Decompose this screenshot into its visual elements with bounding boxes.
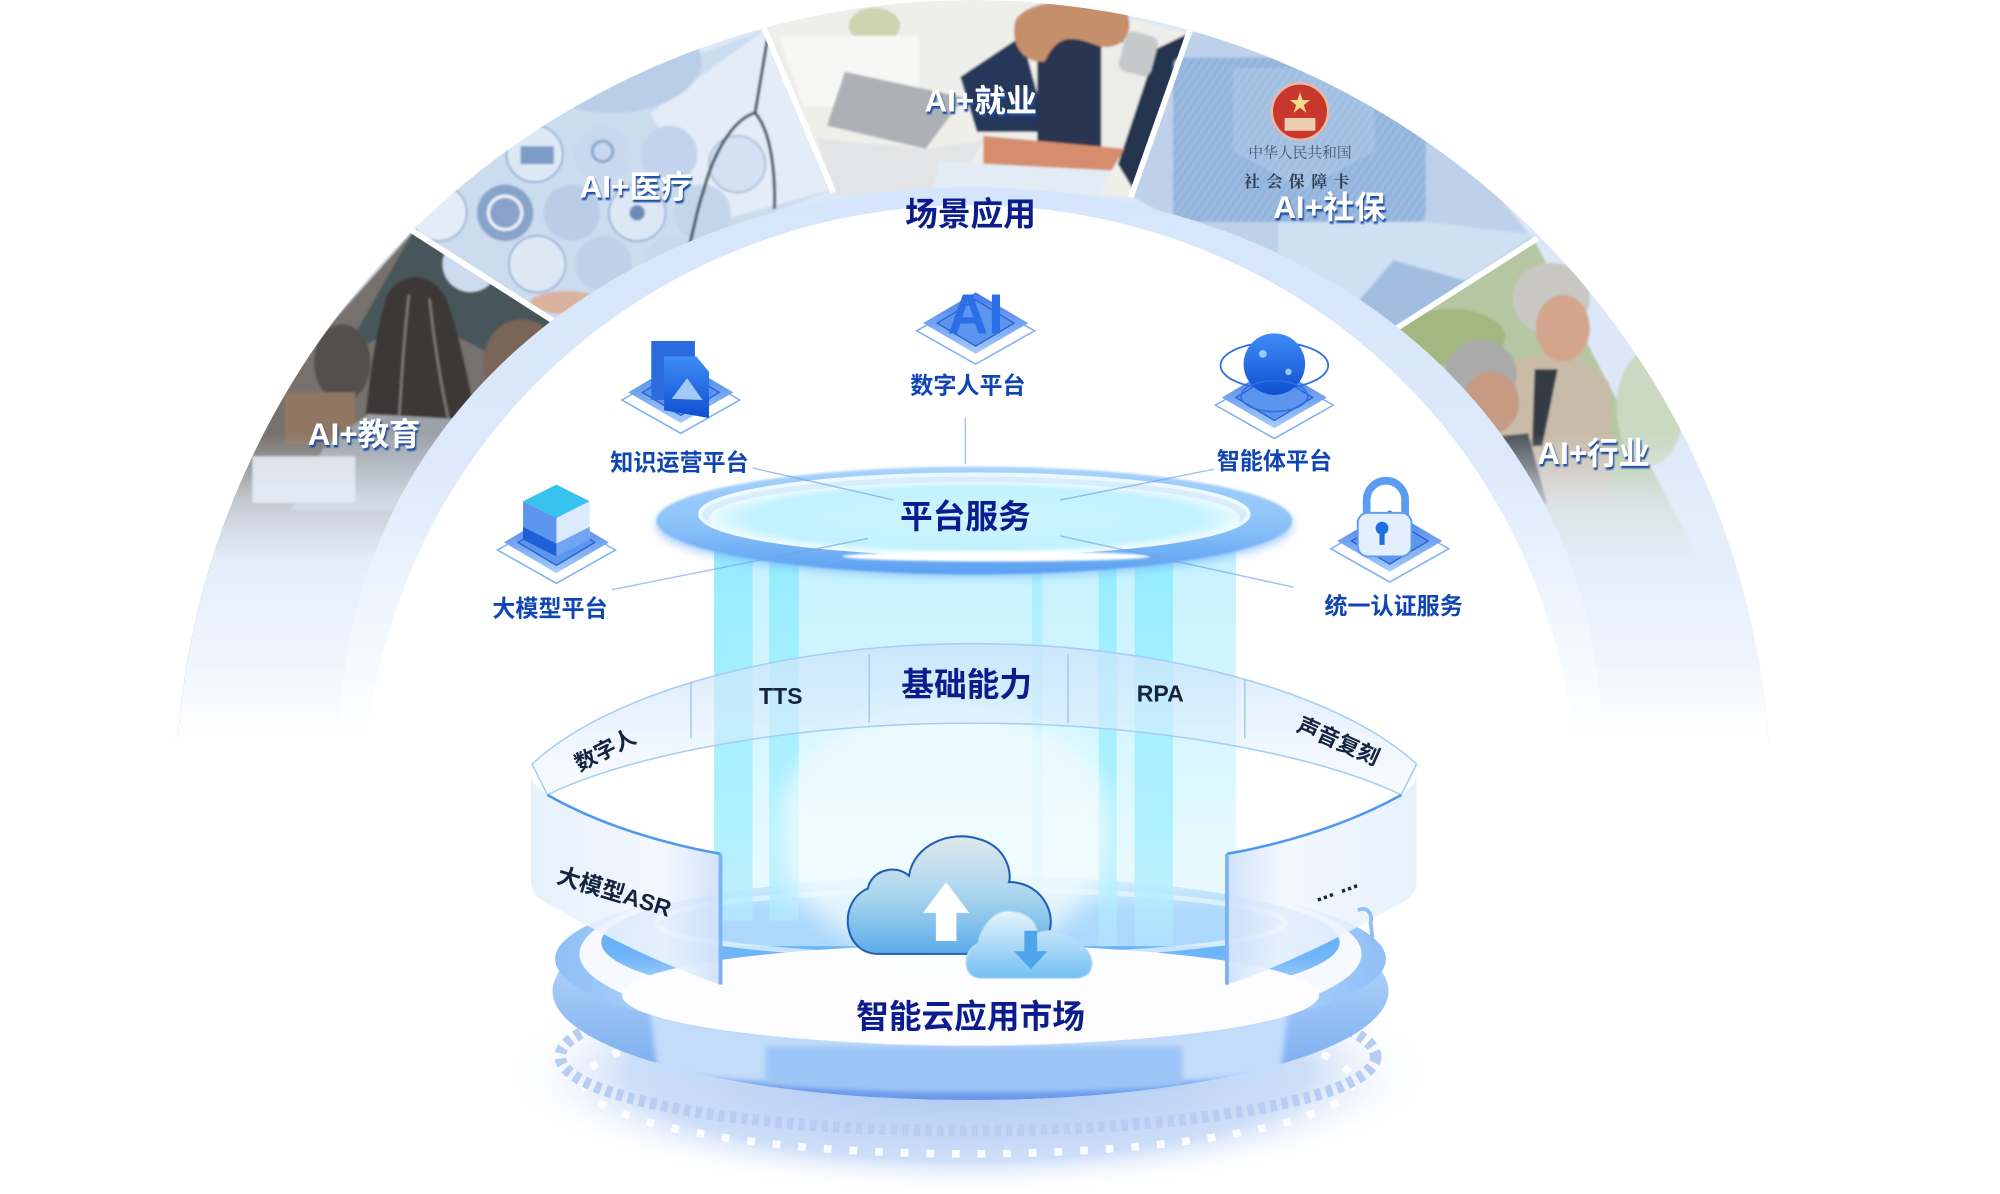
capability labels: 声音复刻 <box>1294 712 1383 770</box>
photo sectors <box>163 0 1791 738</box>
service: unified authentication <box>1324 481 1463 619</box>
sector labels: AI+医疗 <box>580 169 692 204</box>
capability labels: 数字人 <box>570 724 640 776</box>
heading: cloud app market: 智能云应用市场 <box>856 998 1085 1035</box>
heading: platform services: 平台服务 <box>900 498 1031 535</box>
capability labels: TTS <box>759 683 803 709</box>
service: digital human platform: 数字人平台 <box>910 373 1026 399</box>
capability labels: 基础能力 <box>901 666 1032 703</box>
heading: scene applications: 场景应用 <box>905 196 1036 233</box>
platform services disk <box>656 467 1292 577</box>
icon: documents <box>622 341 740 433</box>
social card emblem and text: 社会保障卡 <box>1244 172 1356 191</box>
base fill of outer arc <box>163 0 1791 741</box>
base well <box>601 876 1340 1009</box>
capability labels <box>570 666 1383 776</box>
photo: industry <box>1387 241 1791 738</box>
foundation ring left panel <box>530 764 721 985</box>
service: knowledge platform <box>610 341 749 476</box>
service: agent platform: 智能体平台 <box>1217 448 1332 474</box>
icon: lock <box>1331 481 1449 582</box>
foundation ring right panel: ... ... <box>1310 867 1361 907</box>
connector lines <box>612 418 1294 590</box>
service: large model platform: 大模型平台 <box>492 596 608 622</box>
social card emblem and text: 中华人民共和国 <box>1248 145 1352 162</box>
base body <box>553 882 1388 1100</box>
social card emblem and text <box>1244 83 1356 191</box>
service: digital human platform <box>910 282 1035 399</box>
base platform <box>500 867 1436 1194</box>
icon: globe <box>1215 333 1333 438</box>
icon: cloud upload and download <box>848 836 1092 978</box>
inner dome band <box>340 187 1601 741</box>
foundation ring right panel <box>1227 764 1417 985</box>
light column <box>714 549 1236 959</box>
service: large model platform <box>492 485 615 622</box>
photo: social security <box>1131 23 1535 333</box>
bottom fade of arc <box>176 438 1770 741</box>
sector labels: AI+社保 <box>1273 190 1386 225</box>
photo: employment <box>765 0 1188 196</box>
inner white dome <box>365 205 1576 754</box>
sector labels: AI+行业 <box>1537 436 1650 471</box>
capability labels: RPA <box>1137 680 1184 706</box>
sector labels <box>308 84 1650 471</box>
sector labels: AI+就业 <box>924 84 1037 119</box>
foundation ring back band <box>532 644 1417 795</box>
dome: scene applications arc <box>163 0 1791 754</box>
photo: medical <box>414 32 816 318</box>
base fins <box>500 950 1436 1194</box>
sector labels: AI+教育 <box>308 417 420 452</box>
icon: AI: AI <box>947 282 1004 345</box>
service: agent platform <box>1215 333 1333 474</box>
sector dividers <box>410 28 1537 336</box>
service: unified authentication: 统一认证服务 <box>1324 593 1463 619</box>
photo: education <box>163 232 564 738</box>
base top rim <box>555 872 1386 1046</box>
foundation ring left panel: 大模型ASR <box>554 862 675 922</box>
base floor <box>622 945 1319 1045</box>
service: knowledge platform: 知识运营平台 <box>610 450 749 476</box>
icon: cubes <box>497 485 615 583</box>
